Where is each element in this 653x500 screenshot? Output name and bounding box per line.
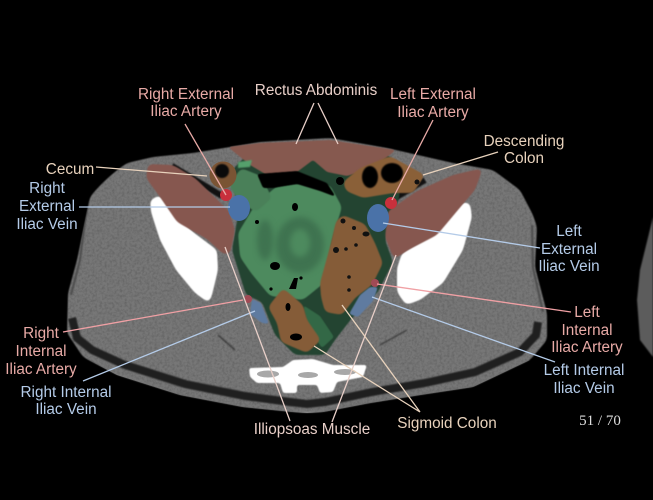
label: right external iliac vein: Right xyxy=(29,180,66,197)
left external iliac artery xyxy=(385,197,397,209)
label: left internal iliac vein: Iliac Vein xyxy=(553,380,615,397)
label: right external iliac vein: External xyxy=(19,198,75,215)
left external iliac vein xyxy=(367,204,389,232)
label: right internal iliac vein: Iliac Vein xyxy=(35,401,97,418)
infographic canvas xyxy=(6,84,653,438)
label: left internal iliac artery: Internal xyxy=(561,322,613,339)
right external iliac artery xyxy=(220,189,232,201)
label: left external iliac vein: Left xyxy=(556,223,583,240)
left internal iliac artery xyxy=(371,279,379,287)
label: left internal iliac artery: Iliac Artery xyxy=(551,339,623,356)
label: right internal iliac vein: Right Internal xyxy=(21,384,111,401)
right external vein line xyxy=(79,206,230,208)
sigmoid colon upper loop xyxy=(320,215,383,315)
body outline xyxy=(67,138,547,413)
iliopsoas lines xyxy=(225,247,396,422)
sigmoid colon lower loop xyxy=(268,288,321,353)
right internal iliac vein xyxy=(250,299,269,324)
slice counter: 51 / 70 xyxy=(579,413,621,429)
left internal vein line xyxy=(372,297,555,362)
label: sigmoid colon: Sigmoid Colon xyxy=(397,415,497,432)
label: right external iliac artery: Iliac Artery xyxy=(150,103,222,120)
label: descending colon: Colon xyxy=(504,150,544,167)
label: left internal iliac artery: Left xyxy=(574,304,601,321)
label: left external iliac vein: External xyxy=(541,241,597,258)
right internal iliac artery xyxy=(244,295,252,303)
label: cecum: Cecum xyxy=(46,161,94,178)
left iliac bone xyxy=(397,202,472,305)
left external artery line xyxy=(392,120,433,200)
label: left external iliac artery: Left External xyxy=(390,86,476,103)
air in bowel xyxy=(255,171,336,291)
label: right external iliac artery: Right External xyxy=(138,86,234,103)
ct noise texture xyxy=(68,138,546,412)
label: left internal iliac vein: Left Internal xyxy=(544,362,624,379)
right iliac bone xyxy=(150,195,218,303)
sacrum xyxy=(249,359,367,393)
leader lines xyxy=(63,103,571,422)
label: right internal iliac artery: Iliac Artery xyxy=(5,361,77,378)
label: rectus abdominis: Rectus Abdominis xyxy=(255,82,378,99)
right external iliac vein xyxy=(228,195,250,221)
right internal artery line xyxy=(63,300,243,332)
label: left external iliac artery: Iliac Artery xyxy=(397,104,469,121)
cecum xyxy=(210,162,236,188)
left internal iliac vein xyxy=(349,287,378,317)
cecum line xyxy=(96,167,207,176)
label: left external iliac vein: Iliac Vein xyxy=(538,258,600,275)
right external artery line xyxy=(185,124,226,195)
central dark pelvic cavity xyxy=(232,152,400,355)
label: right external iliac vein: Iliac Vein xyxy=(16,216,78,233)
label: iliopsoas muscle: Illiopsoas Muscle xyxy=(254,421,370,438)
label: descending colon: Descending xyxy=(484,133,564,150)
descending colon line xyxy=(423,152,498,175)
neighbouring slice sliver xyxy=(637,217,653,357)
rectus abdominis xyxy=(228,140,396,176)
labels xyxy=(5,82,624,438)
left internal artery line xyxy=(377,284,571,312)
subcutaneous fat bands xyxy=(71,166,543,413)
bowel: green small intestine xyxy=(229,160,342,348)
left external vein line xyxy=(383,223,540,248)
CT scan: pelvic cross-section xyxy=(66,138,653,414)
label: right internal iliac artery: Right xyxy=(23,325,60,342)
sigmoid lines xyxy=(314,305,420,412)
right internal vein line xyxy=(83,311,255,381)
left iliopsoas muscle xyxy=(385,168,483,259)
label: right internal iliac artery: Internal xyxy=(15,343,67,360)
descending colon xyxy=(336,156,425,198)
rectus lines xyxy=(296,103,338,144)
right iliopsoas muscle xyxy=(146,164,235,254)
